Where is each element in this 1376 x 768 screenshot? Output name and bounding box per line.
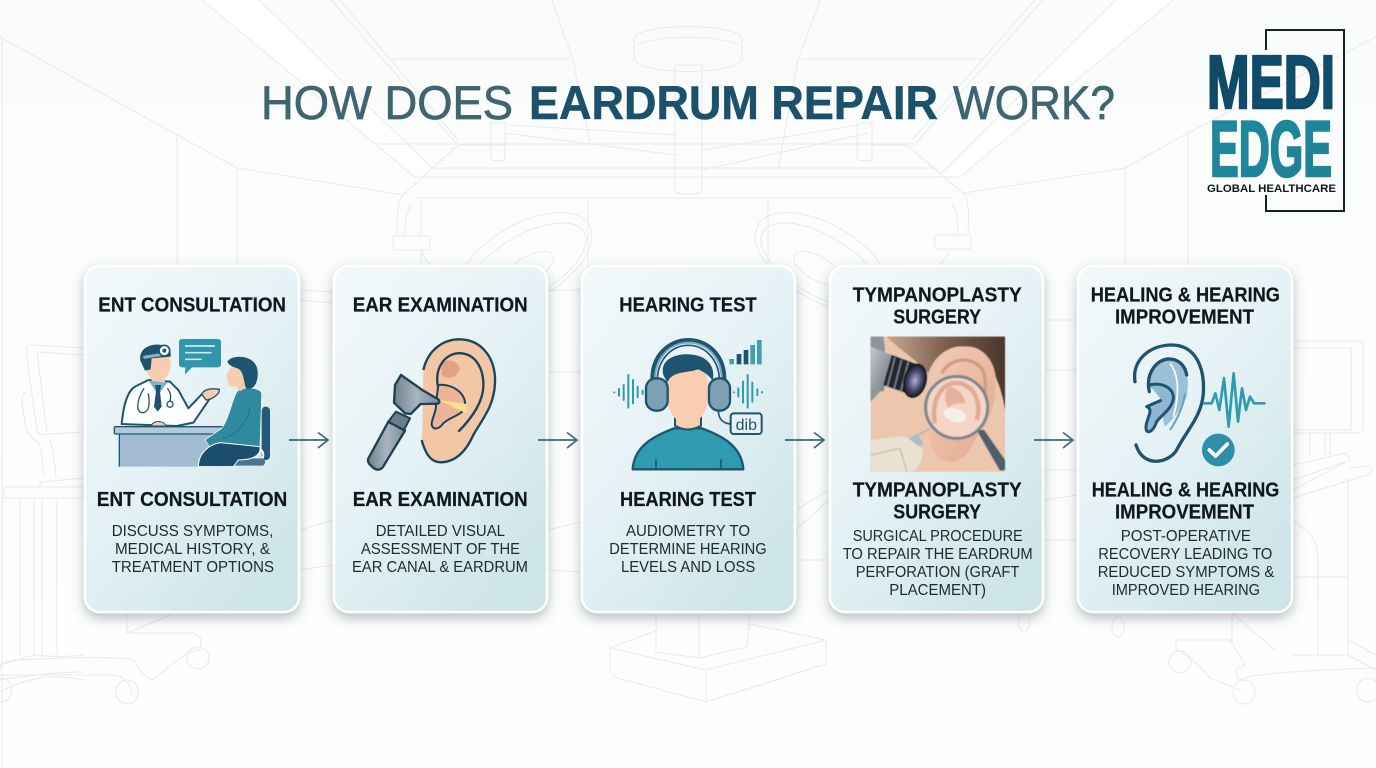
description [352,523,528,576]
heading: tympanoplasty surgery repeat: SURGERY [893,501,982,523]
arrow: step 1 to 2 [289,432,328,448]
icon: doctor and patient consultation [114,339,270,467]
heading: tympanoplasty surgery: SURGERY [893,306,982,328]
panel: tympanoplasty surgery [830,266,1043,612]
heading: hearing test: HEARING TEST [619,295,757,317]
heading: healing and hearing improvement [1091,285,1280,328]
heading: ear examination repeat: EAR EXAMINATION [353,489,528,511]
heading: tympanoplasty surgery [853,285,1022,328]
illustration: ear surgery with microscope and magnifier [871,337,1005,472]
description: DETAILED VISUAL [376,523,505,540]
description [112,523,274,576]
icon: person with headphones: dib [736,417,757,434]
logo: Medi Edge Global Healthcare [1207,30,1344,211]
heading: tympanoplasty surgery repeat [853,480,1022,523]
description: TREATMENT OPTIONS [112,559,274,576]
description: LEVELS AND LOSS [621,559,755,576]
description: IMPROVED HEARING [1112,582,1260,599]
description: EAR CANAL & EARDRUM [352,559,528,576]
description: DISCUSS SYMPTOMS, [112,523,273,540]
heading: healing and hearing improvement: HEALING & HEARING [1091,285,1280,307]
description: TO REPAIR THE EARDRUM [843,546,1033,563]
heading: ENT consultation repeat: ENT CONSULTATION [97,489,287,511]
panel: ear examination [334,266,547,612]
heading: healing and hearing improvement repeat: IMPROVEMENT [1115,501,1254,523]
arrow: step 4 to 5 [1034,432,1073,448]
arrow: step 3 to 4 [785,432,824,448]
description: REDUCED SYMPTOMS & [1098,564,1275,581]
heading: hearing test repeat: HEARING TEST [620,489,756,511]
arrow: step 2 to 3 [538,432,577,448]
heading: healing and hearing improvement repeat: HEALING & HEARING [1092,480,1279,502]
description: AUDIOMETRY TO [626,523,750,540]
description: DETERMINE HEARING [609,541,767,558]
description: ASSESSMENT OF THE [361,541,520,558]
title: WORK? [953,76,1115,129]
description [1098,528,1275,599]
heading: tympanoplasty surgery: TYMPANOPLASTY [853,285,1022,307]
icon: otoscope and ear [368,339,495,470]
heading: ENT consultation: ENT CONSULTATION [98,295,286,317]
logo: Medi Edge Global Healthcare: GLOBAL HEALTHCARE [1207,183,1336,195]
description: SURGICAL PROCEDURE [853,528,1023,545]
title: HOW DOES [261,76,513,129]
panel: healing and hearing improvement [1078,266,1292,612]
heading: ear examination: EAR EXAMINATION [353,295,528,317]
panel: hearing test [582,266,795,612]
description: POST-OPERATIVE [1121,528,1251,545]
icon: healed ear with sound wave and check mark [1135,345,1264,466]
heading: healing and hearing improvement: IMPROVEMENT [1115,306,1254,328]
heading: healing and hearing improvement repeat [1092,480,1279,523]
title [261,76,1115,129]
icon: person with headphones [614,340,762,469]
description [609,523,767,576]
description: PERFORATION (GRAFT [856,564,1020,581]
description: MEDICAL HISTORY, & [115,541,270,558]
description: RECOVERY LEADING TO [1098,546,1272,563]
description: PLACEMENT) [889,582,986,599]
title: EARDRUM REPAIR [529,76,938,129]
heading: tympanoplasty surgery repeat: TYMPANOPLASTY [853,480,1022,502]
description [843,528,1033,599]
panel: ENT consultation [85,266,299,612]
